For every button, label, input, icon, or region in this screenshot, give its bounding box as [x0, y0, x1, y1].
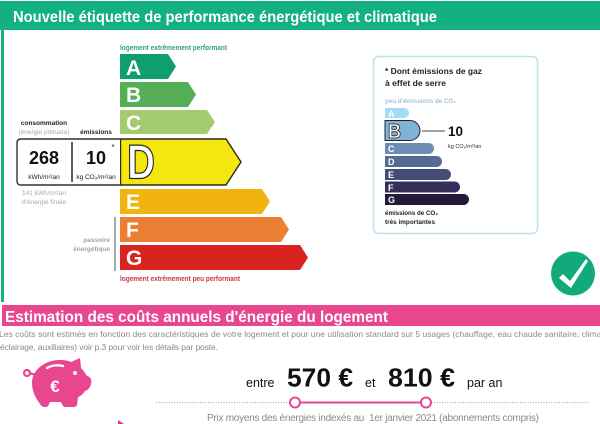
bar F	[120, 217, 289, 242]
CO2 bar E	[385, 169, 451, 180]
icon: clipped pink marker	[118, 420, 124, 424]
CO2 bar B highlighted	[385, 120, 420, 143]
CO2 bar C	[385, 143, 434, 154]
chart: energy class scale	[120, 45, 308, 283]
consumption value: 268	[29, 148, 59, 168]
emissions value: *	[111, 143, 115, 152]
label: high emissions	[385, 211, 438, 226]
label: high emissions: émissions de CO₂	[385, 211, 438, 217]
cost range amounts: 810 €	[388, 362, 455, 392]
cost range slider	[156, 398, 590, 408]
bar G	[120, 245, 308, 270]
panel: energy label header	[0, 1, 600, 302]
bar D highlighted	[120, 136, 241, 190]
emissions value	[76, 143, 116, 181]
bar G: G	[126, 247, 142, 270]
title: Nouvelle étiquette de performance énergétique et climatique	[13, 9, 437, 26]
CO2 value callout	[422, 124, 481, 150]
label: low emissions: peu d'émissions de CO₂	[385, 99, 456, 105]
bar C	[120, 110, 215, 135]
emissions value: kg CO₂/m²/an	[76, 174, 116, 181]
icon: piggy bank	[24, 358, 91, 407]
label: passoire énergétique	[73, 217, 116, 271]
cost range amounts: entre	[246, 376, 275, 390]
text: cost description	[0, 329, 600, 352]
column headings: émissions	[80, 129, 112, 136]
label: passoire énergétique: énergétique	[73, 246, 110, 253]
CO2 bar D: D	[388, 157, 395, 167]
CO2 bar A: A	[388, 109, 395, 119]
panel heading: * Dont émissions de gaz	[385, 67, 482, 76]
icon: piggy bank: €	[50, 377, 60, 396]
CO2 bar E: E	[388, 170, 394, 180]
panel: cost estimate heading	[2, 305, 600, 326]
icon: check mark	[551, 252, 595, 296]
label: bottom of scale: logement extrêmement peu performant	[120, 276, 241, 283]
cost range amounts: par an	[467, 376, 502, 390]
CO2 bar B highlighted: B	[388, 121, 401, 143]
CO2 bar F: F	[388, 183, 394, 193]
note: final energy: d'énergie finale	[22, 199, 66, 206]
column headings	[18, 120, 112, 136]
cost range amounts	[246, 362, 502, 392]
consumption value	[28, 148, 60, 181]
bar A: A	[126, 57, 141, 80]
CO2 bar F	[385, 182, 460, 193]
emissions value: 10	[86, 148, 106, 168]
CO2 bar C: C	[388, 144, 395, 154]
CO2 bar D	[385, 156, 442, 167]
bar E	[120, 189, 270, 214]
text: price note: Prix moyens des énergies indexés au 1er janvier 2021 (abonnements compris)	[207, 413, 539, 424]
bar A	[120, 54, 176, 80]
panel heading: à effet de serre	[385, 79, 447, 88]
CO2 bar G: G	[388, 195, 395, 205]
bar B: B	[126, 84, 141, 107]
bar D highlighted: D	[127, 136, 155, 190]
panel heading	[385, 67, 482, 88]
CO2 bar A	[385, 108, 409, 119]
cost heading text: Estimation des coûts annuels d'énergie du logement	[5, 309, 389, 326]
consumption value: kWh/m²/an	[28, 174, 60, 181]
panel: greenhouse gas emissions	[374, 56, 538, 234]
text: cost description: éclairage, auxiliaires) voir p.3 pour voir les détails par poste.	[0, 342, 218, 352]
column headings: consommation	[21, 120, 67, 127]
note: final energy: 141 kWh/m²/an	[22, 190, 66, 197]
label: passoire énergétique: passoire	[83, 237, 110, 244]
bar C: C	[126, 112, 141, 135]
bar E: E	[126, 191, 140, 214]
cost range amounts: et	[365, 376, 376, 390]
bar F: F	[126, 219, 139, 242]
label: top of scale: logement extrêmement performant	[120, 45, 228, 52]
column headings: (énergie primaire)	[18, 129, 70, 136]
label: high emissions: très importantes	[385, 220, 436, 226]
note: final energy	[22, 190, 66, 206]
bar B	[120, 82, 196, 107]
CO2 value callout: kg CO₂/m²/an	[448, 144, 481, 150]
CO2 bar G	[385, 194, 469, 205]
cost range amounts: 570 €	[287, 362, 353, 392]
values box	[17, 139, 120, 185]
CO2 value callout: 10	[448, 124, 463, 139]
